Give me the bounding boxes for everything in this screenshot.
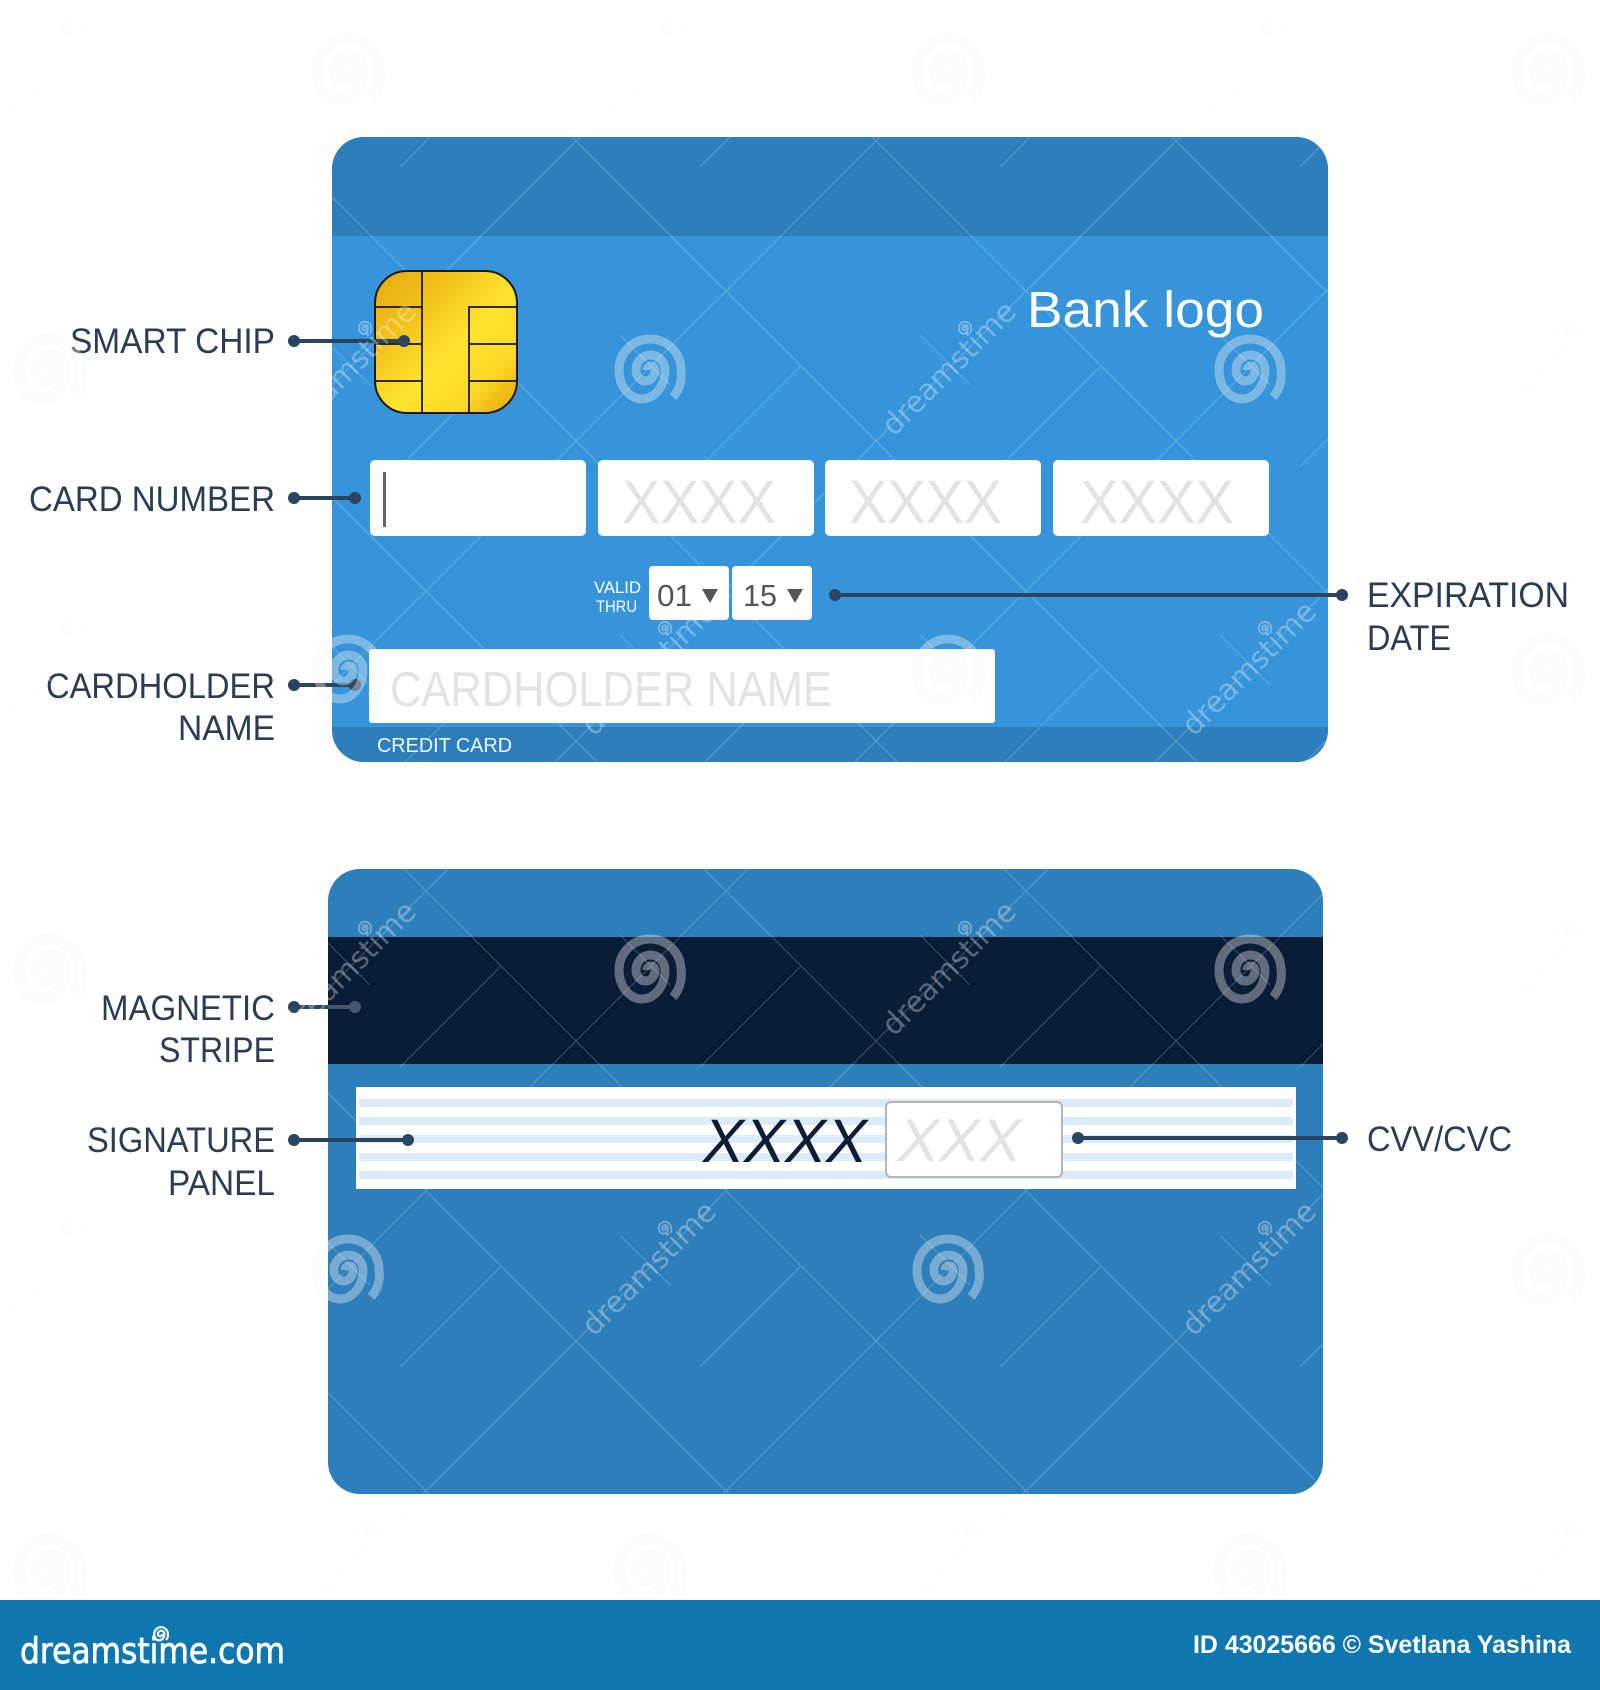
callout: expiration date: DATE bbox=[1367, 619, 1451, 658]
cvv box bbox=[886, 1102, 1062, 1177]
expiry date selector: 15 bbox=[743, 578, 777, 613]
icon: footer spiral bbox=[154, 1627, 168, 1640]
card number fields bbox=[370, 460, 1269, 536]
signature panel bbox=[356, 1087, 1296, 1189]
watermark overlay: dreamstime bbox=[875, 1494, 1024, 1643]
callout: smart chip bbox=[70, 322, 410, 361]
callout: cardholder name bbox=[46, 667, 361, 748]
footer brand: dreamstime.com bbox=[20, 1631, 285, 1672]
text: bank logo: Bank logo bbox=[1027, 281, 1264, 338]
expiry date selector: VALID bbox=[594, 578, 641, 597]
callout: expiration date bbox=[829, 576, 1569, 658]
signature panel: XXXX bbox=[701, 1107, 869, 1175]
card number fields: XXXX bbox=[622, 468, 776, 536]
cvv box: XXX bbox=[896, 1107, 1023, 1174]
watermark overlay: dreamstime bbox=[575, 594, 724, 743]
watermark overlay: dreamstime bbox=[275, 894, 424, 1043]
footer bar bbox=[0, 1600, 1600, 1690]
watermark overlay: dreamstime bbox=[1175, 594, 1324, 743]
panel: card front bbox=[332, 137, 1328, 762]
expiry date selector: THRU bbox=[596, 597, 637, 616]
callout: expiration date: EXPIRATION bbox=[1367, 576, 1569, 615]
panel: card back bbox=[328, 869, 1323, 1494]
card front body bbox=[332, 137, 1328, 762]
callout: cvv/cvc: CVV/CVC bbox=[1367, 1120, 1512, 1159]
cardholder name field: CARDHOLDER NAME bbox=[390, 663, 832, 717]
card number fields: XXXX bbox=[849, 468, 1002, 536]
callout: magnetic stripe bbox=[101, 989, 361, 1070]
footer credit: ID 43025666 © Svetlana Yashina bbox=[1193, 1631, 1572, 1659]
expiry date selector: 01 bbox=[657, 578, 692, 613]
callout: signature panel: SIGNATURE bbox=[87, 1121, 275, 1160]
watermark overlay: dreamstime bbox=[275, 294, 424, 443]
text: credit card: CREDIT CARD bbox=[377, 735, 512, 757]
callout: signature panel: PANEL bbox=[168, 1164, 275, 1203]
expiry date selector bbox=[594, 566, 812, 620]
watermark overlay: dreamstime bbox=[275, 1494, 424, 1643]
card number fields: XXXX bbox=[1080, 468, 1234, 536]
callout: cardholder name: CARDHOLDER bbox=[46, 667, 275, 706]
callout: signature panel bbox=[87, 1121, 414, 1203]
icon: smart chip bbox=[375, 271, 517, 413]
cardholder name field bbox=[369, 649, 995, 723]
card back body bbox=[328, 869, 1323, 1494]
callout: cvv/cvc bbox=[1072, 1120, 1512, 1159]
watermark overlay: dreamstime bbox=[875, 294, 1024, 443]
callout: smart chip: SMART CHIP bbox=[70, 322, 275, 361]
callout: magnetic stripe: MAGNETIC bbox=[101, 989, 275, 1028]
callout: card number: CARD NUMBER bbox=[29, 480, 275, 519]
callout: cardholder name: NAME bbox=[178, 709, 275, 748]
watermark overlay: dreamstime bbox=[875, 894, 1024, 1043]
watermark overlay: dreamstime bbox=[575, 1194, 724, 1343]
watermark overlay: dreamstime bbox=[1175, 1194, 1324, 1343]
callout: magnetic stripe: STRIPE bbox=[159, 1031, 275, 1070]
